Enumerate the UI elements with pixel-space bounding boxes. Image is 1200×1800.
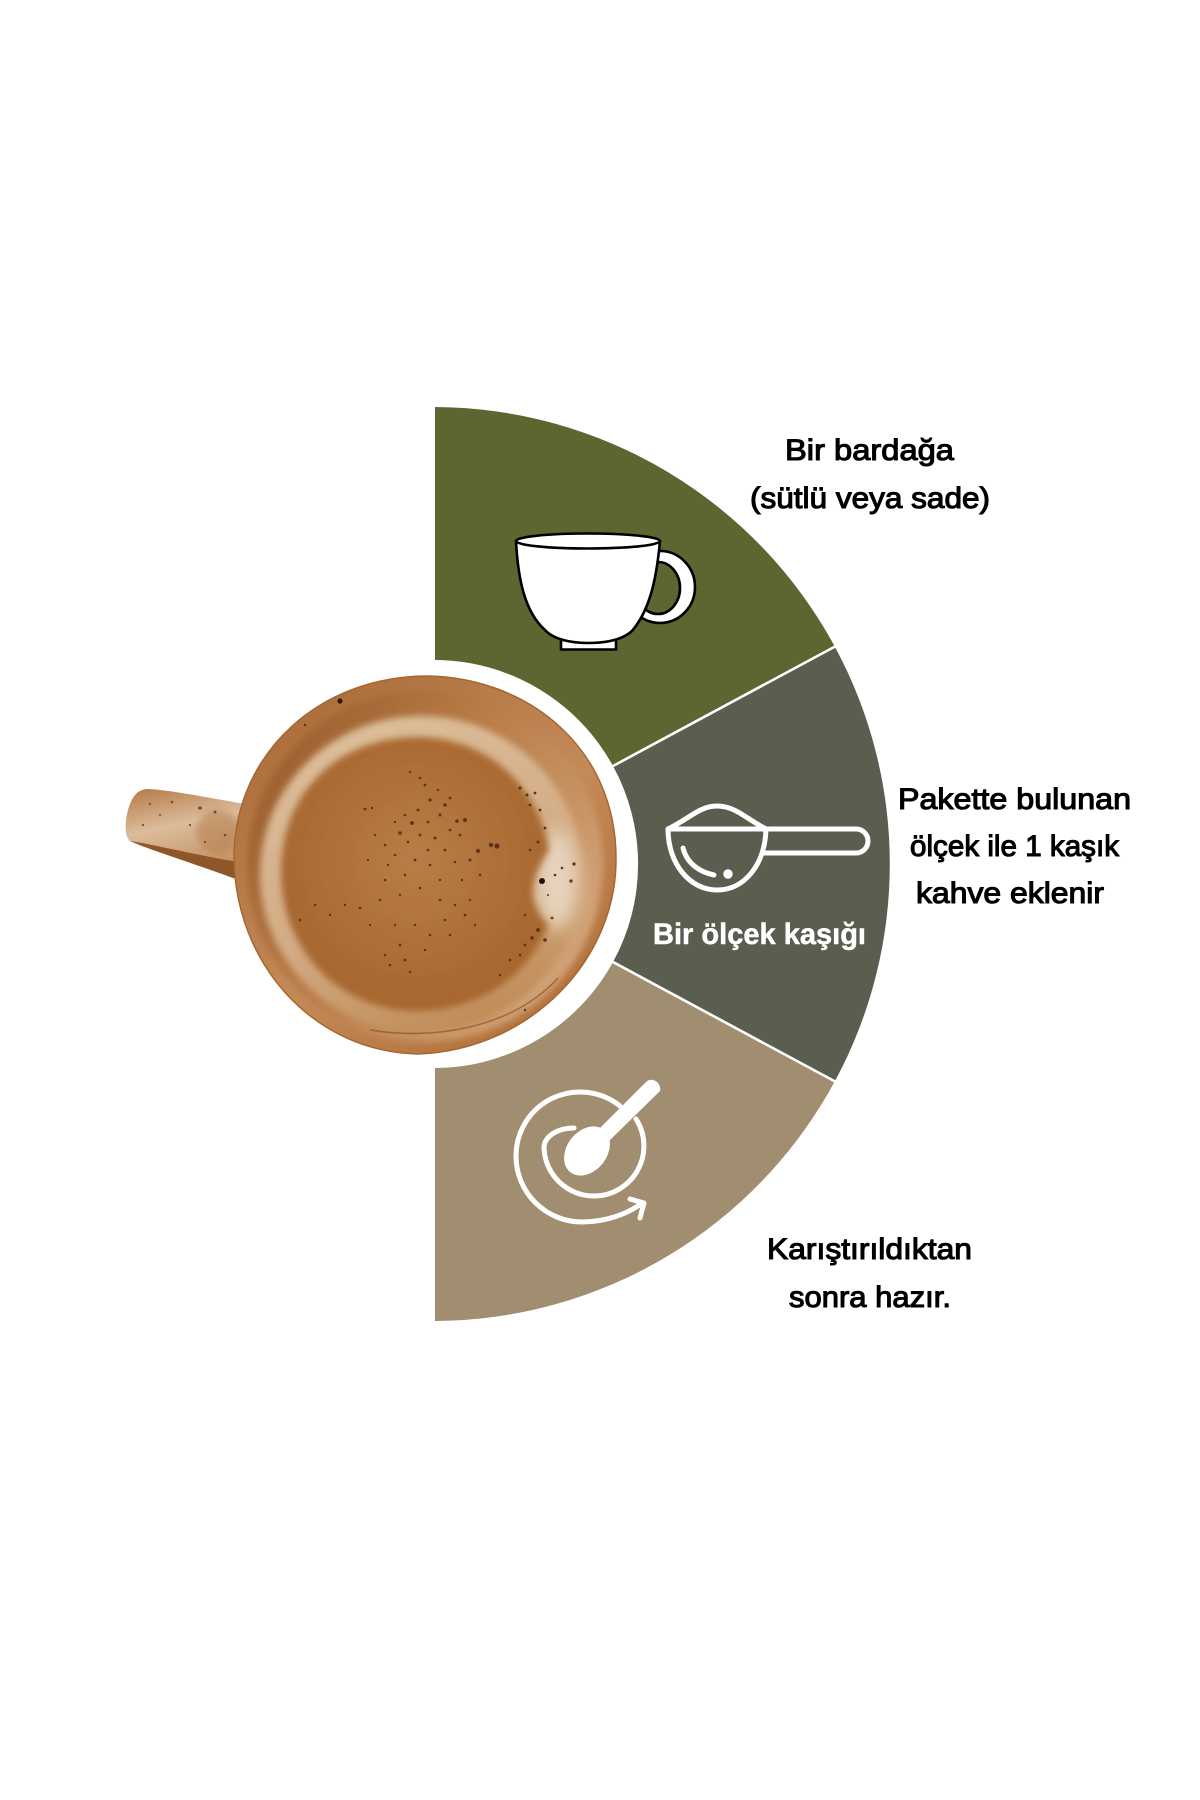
foam ring [260, 716, 582, 1032]
text: step 2: Pakette bulunan [898, 783, 1131, 816]
text: step 1: Bir bardağa [785, 434, 954, 467]
stir arcs [516, 1092, 644, 1222]
cup icon handle opening [636, 562, 680, 614]
cup icon handle ring [625, 551, 695, 623]
wall shadow line [370, 978, 558, 1033]
bright foam on right side [535, 830, 579, 930]
text: step 3: Karıştırıldıktan [767, 1233, 972, 1266]
sector dividers [613, 646, 836, 1082]
cup inner wall [247, 690, 603, 1042]
panel: step 3 tan sector [435, 962, 835, 1321]
text: step 2 [898, 783, 1131, 910]
text: step 2: ölçek ile 1 kaşık [910, 830, 1120, 863]
text: step 3 [767, 1233, 972, 1314]
photo: coffee cup from above [126, 676, 616, 1054]
panel: step 2 slate sector [613, 647, 890, 1081]
text: step 1: (sütlü veya sade) [750, 482, 990, 515]
panel: step 1 olive sector [435, 407, 835, 766]
cup icon body [516, 541, 660, 643]
text: step 1 [750, 434, 990, 515]
label: scoop caption: Bir ölçek kaşığı [653, 918, 866, 951]
coffee surface [281, 737, 549, 1011]
text: step 2: kahve eklenir [916, 877, 1104, 910]
cup handle [126, 789, 256, 884]
text: step 3: sonra hazır. [789, 1281, 951, 1314]
icon: white coffee cup [516, 534, 695, 650]
cup bowl rim [234, 676, 616, 1054]
spoon [555, 1080, 660, 1185]
cup icon rim [516, 534, 660, 548]
icon: stirring spoon [516, 1080, 660, 1222]
icon: measuring scoop [668, 806, 868, 890]
cup icon foot [561, 640, 616, 650]
coffee specks [299, 698, 576, 1011]
